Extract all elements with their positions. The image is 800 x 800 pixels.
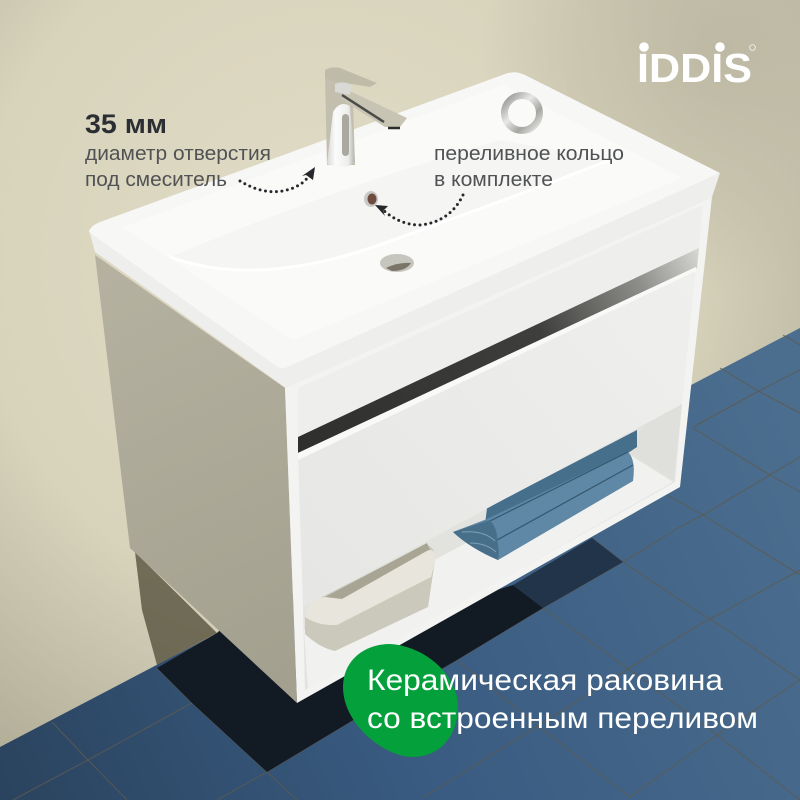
- ceramic basin: [89, 72, 720, 388]
- overflow hole: [364, 191, 378, 207]
- cabinet shadow on floor and wall: [135, 538, 623, 772]
- bowl: [170, 140, 610, 270]
- headline: [367, 664, 758, 735]
- basin recess: [123, 85, 682, 340]
- callout: hole diameter: [85, 109, 271, 191]
- headline: со встроенным переливом: [367, 702, 758, 735]
- overflow ring accessory: [504, 96, 540, 130]
- top panel: [298, 205, 703, 437]
- arrow: to overflow hole: [375, 195, 463, 225]
- cabinet side panel: [95, 255, 297, 703]
- tiled floor: [0, 328, 800, 800]
- headline: Керамическая раковина: [367, 664, 723, 697]
- folded blue towels: [453, 430, 637, 560]
- open compartment: [303, 404, 682, 690]
- drain: [380, 254, 414, 272]
- basin top: [89, 72, 720, 368]
- callout: overflow ring: в комплекте: [434, 168, 553, 191]
- cabinet: [95, 197, 712, 703]
- logo: IDDIS: IDDIS: [637, 45, 752, 91]
- storage basket: [305, 543, 435, 651]
- cabinet front frame: [285, 197, 712, 703]
- drawer top bevel: [298, 267, 696, 460]
- bowl highlight: [170, 160, 610, 270]
- description: диаметр отверстия: [85, 142, 271, 165]
- value: 35 мм: [85, 109, 167, 139]
- callout: overflow ring: [434, 142, 624, 191]
- faucet: [325, 67, 407, 167]
- callout: hole diameter: под смеситель: [85, 168, 227, 191]
- callout: overflow ring: переливное кольцо: [434, 142, 624, 165]
- basin lip: [89, 173, 720, 388]
- arrow: to faucet hole: [240, 167, 315, 192]
- dark gap above drawer: [298, 248, 699, 453]
- green accent blob: [343, 644, 458, 757]
- drawer front: [298, 267, 696, 607]
